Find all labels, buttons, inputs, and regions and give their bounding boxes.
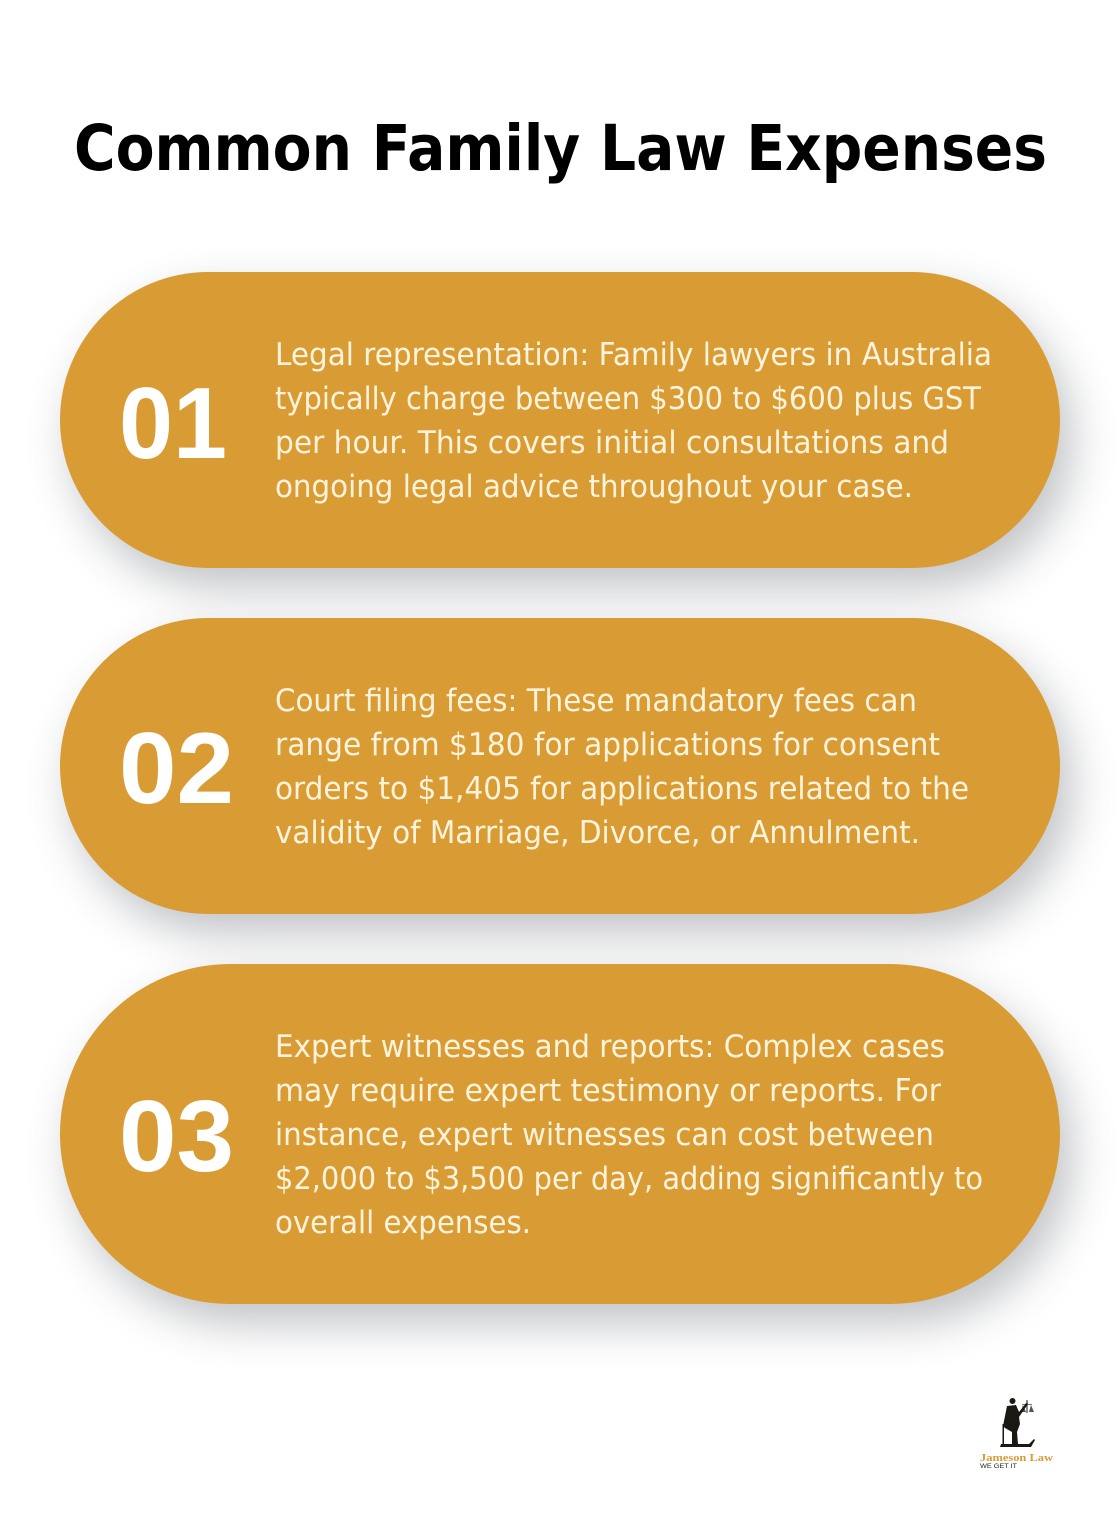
text: legal representation: Legal representation: Family lawyers in Australia (275, 337, 992, 373)
number 01: 01 (119, 368, 227, 480)
number 02: 02 (119, 713, 234, 825)
panel: expert witnesses card (60, 964, 1060, 1304)
logo name: Jameson Law (980, 1453, 1053, 1464)
text: expert witnesses (275, 1029, 983, 1241)
text: court filing fees: orders to $1,405 for applications related to the (275, 771, 969, 807)
logo tagline: WE GET IT (980, 1463, 1017, 1470)
logo: Jameson Law (980, 1398, 1053, 1470)
panel: legal representation card (60, 272, 1060, 568)
text: court filing fees: validity of Marriage, Divorce, or Annulment. (275, 815, 920, 851)
text: court filing fees: range from $180 for applications for consent (275, 727, 940, 763)
text: legal representation: ongoing legal advice throughout your case. (275, 469, 913, 505)
text: expert witnesses: overall expenses. (275, 1205, 531, 1241)
number 03: 03 (119, 1081, 234, 1193)
text: court filing fees (275, 683, 969, 851)
text: expert witnesses: Expert witnesses and reports: Complex cases (275, 1029, 945, 1065)
panel: court filing fees card (60, 618, 1060, 914)
text: expert witnesses: $2,000 to $3,500 per day, adding significantly to (275, 1161, 983, 1197)
text: legal representation (275, 337, 992, 505)
icon: lady justice (1000, 1398, 1035, 1447)
text: expert witnesses: instance, expert witnesses can cost between (275, 1117, 934, 1153)
text: legal representation: typically charge between $300 to $600 plus GST (275, 381, 982, 417)
text: expert witnesses: may require expert testimony or reports. For (275, 1073, 941, 1109)
text: legal representation: per hour. This covers initial consultations and (275, 425, 949, 461)
text: court filing fees: Court filing fees: These mandatory fees can (275, 683, 917, 719)
